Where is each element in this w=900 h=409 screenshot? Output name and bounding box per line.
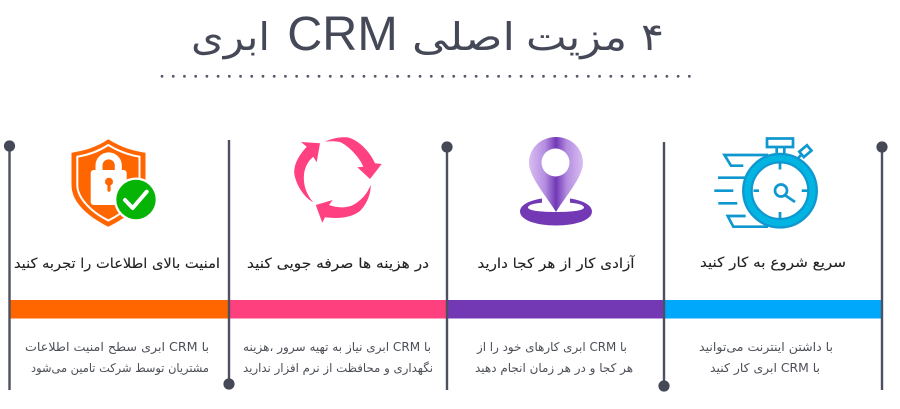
title [191,7,664,61]
body text: security [25,340,209,376]
heading: quick start: سریع شروع به کار کنید [700,255,846,271]
body text: security: مشتریان توسط شرکت تامین می‌شود [31,361,209,376]
body text: quick start: با CRM ابری کار کنید [710,361,820,376]
timeline pole 3 [441,141,453,390]
title: اصلی [412,15,515,59]
heading: security: امنیت بالای اطلاعات را تجربه کنید [14,256,220,272]
heading: cost saving: در هزینه ها صرفه جویی کنید [247,256,429,272]
title: CRM [287,7,398,61]
icon: recycle arrows [294,137,382,223]
body text: work anywhere: هر کجا و در هر زمان انجام دهید [475,361,633,376]
body text: security: با CRM ابری سطح امنیت اطلاعات [25,340,209,355]
title: ۴ [641,15,664,59]
icon: security shield [72,139,158,227]
title: ابری [191,15,270,60]
timeline pole 1 [4,140,15,390]
heading: work anywhere: آزادی کار از هر کجا دارید [478,255,636,272]
body text: quick start [699,340,833,376]
timeline pole 5 [876,141,888,390]
colored band [10,300,882,318]
icon: location pin [520,137,592,226]
body text: work anywhere: با CRM ابری کارهای خود را از [476,340,627,355]
body text: cost saving [243,340,433,376]
body text: cost saving: نگهداری و محافظت از نرم افزار ندارید [243,361,433,376]
timeline pole 2 [223,140,235,390]
body text: work anywhere [475,340,633,376]
icon: stopwatch [714,138,817,227]
body text: quick start: با داشتن اینترنت می‌توانید [699,340,833,355]
body text: cost saving: با CRM ابری نیاز به تهیه سرور ،هزینه [243,340,431,355]
title: مزیت [526,15,627,60]
timeline pole 4 [658,142,670,392]
